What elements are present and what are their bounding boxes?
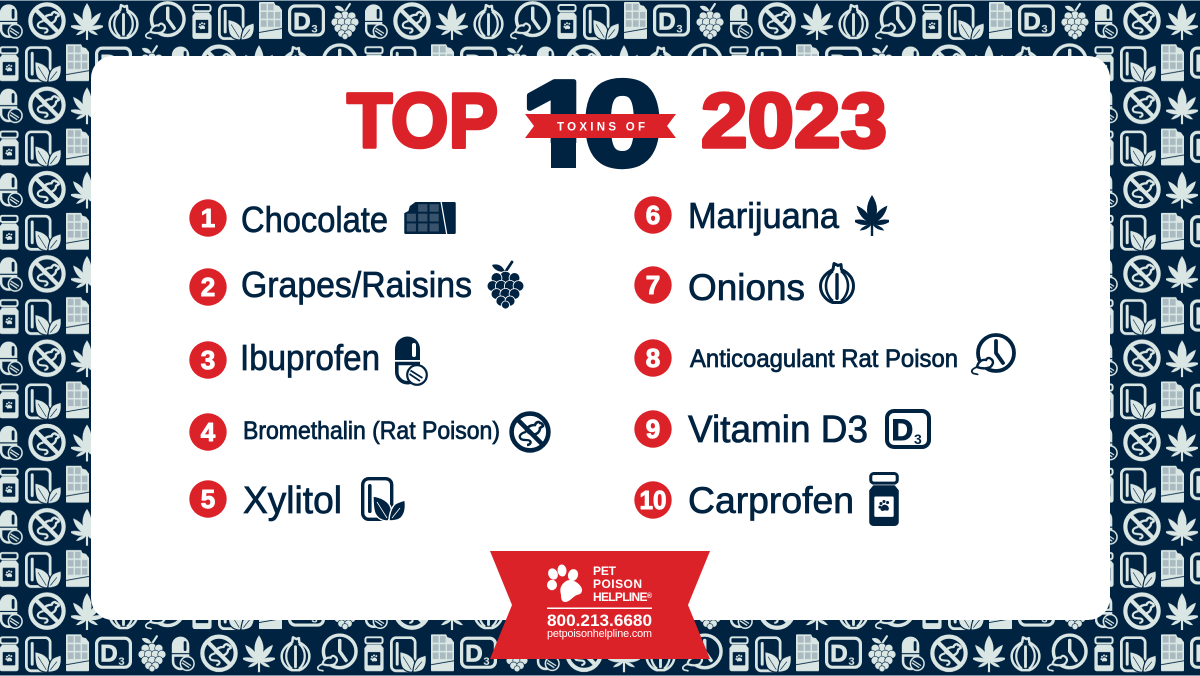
item 6: Marijuana: 6 xyxy=(646,200,660,230)
item 2: Grapes/Raisins: 2 xyxy=(201,272,215,302)
item 4: Bromethalin (Rat Poison): 4 xyxy=(201,417,216,447)
icon: paw xyxy=(546,564,582,602)
logo text: ® xyxy=(647,592,653,600)
item 9: Vitamin D3: 9 xyxy=(646,414,660,444)
item 10: Carprofen: 10 xyxy=(640,485,666,515)
item 2: Grapes/Raisins: Grapes/Raisins xyxy=(241,264,472,305)
item 7: Onions: 7 xyxy=(646,270,660,300)
item 5: Xylitol xyxy=(189,479,405,522)
item 3: Ibuprofen xyxy=(189,337,427,385)
item 7: Onions: Onions xyxy=(688,267,805,308)
banner: Pet Poison Helpline xyxy=(490,551,710,659)
item 9: Vitamin D3: Vitamin D3 xyxy=(688,409,868,451)
title: Top 10 Toxins of 2023: TOXINS OF xyxy=(557,122,645,134)
phone number: 800.213.6680 xyxy=(547,612,652,630)
title: Top 10 Toxins of 2023 xyxy=(347,56,887,192)
item 5: Xylitol: 5 xyxy=(201,484,215,514)
title: Top 10 Toxins of 2023: TOP xyxy=(347,78,498,164)
title: Top 10 Toxins of 2023: 1 xyxy=(520,56,600,192)
logo text: HELPLINE xyxy=(593,590,648,604)
item 1: Chocolate: 1 xyxy=(201,203,215,233)
item 10: Carprofen: Carprofen xyxy=(688,480,854,521)
title: Top 10 Toxins of 2023: 0 xyxy=(582,56,663,192)
item 4: Bromethalin (Rat Poison): Bromethalin (Rat Poison) xyxy=(243,417,500,445)
title: Top 10 Toxins of 2023: 2023 xyxy=(701,78,887,164)
item 8: Anticoagulant Rat Poison: 8 xyxy=(646,343,660,373)
item 4: Bromethalin (Rat Poison) xyxy=(189,413,548,451)
item 2: Grapes/Raisins xyxy=(189,262,524,309)
item 5: Xylitol: Xylitol xyxy=(243,480,342,522)
item 8: Anticoagulant Rat Poison xyxy=(634,335,1014,377)
item 7: Onions xyxy=(634,264,854,308)
item 8: Anticoagulant Rat Poison: Anticoagulant Rat Poison xyxy=(690,345,958,373)
item 9: Vitamin D3 xyxy=(634,409,929,451)
website: petpoisonhelpline.com xyxy=(547,628,652,640)
item 6: Marijuana xyxy=(634,195,892,236)
logo text: PET xyxy=(593,564,617,578)
logo text xyxy=(593,564,653,604)
item 10: Carprofen xyxy=(634,474,899,526)
logo text: POISON xyxy=(593,577,642,591)
item 1: Chocolate xyxy=(189,199,456,240)
panel: white card xyxy=(91,56,1110,620)
item 3: Ibuprofen: 3 xyxy=(201,345,215,375)
item 1: Chocolate: Chocolate xyxy=(241,199,388,240)
item 3: Ibuprofen: Ibuprofen xyxy=(240,337,380,378)
item 6: Marijuana: Marijuana xyxy=(688,195,840,236)
